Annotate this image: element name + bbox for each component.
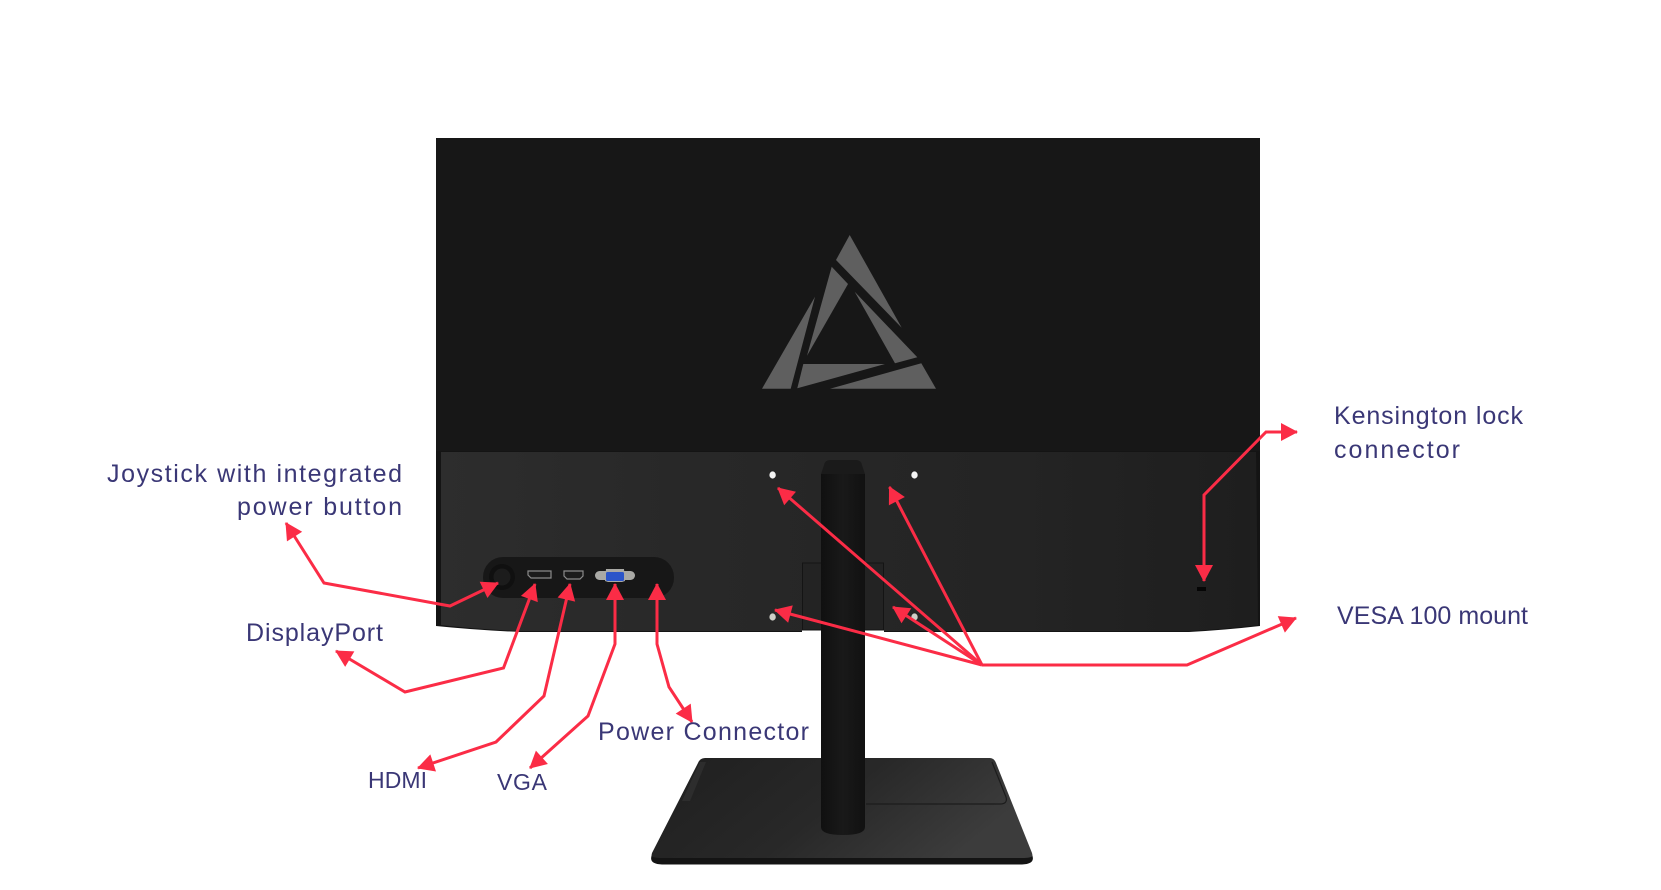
label: Kensington lock connector: Kensington lock bbox=[1334, 402, 1524, 430]
icon: HDMI socket bbox=[564, 571, 583, 579]
lower panel bbox=[441, 452, 1258, 631]
arrow: power connector bbox=[657, 584, 692, 722]
icon: joystick bbox=[489, 564, 515, 590]
logo bbox=[762, 235, 936, 389]
monitor back: lower housing bbox=[436, 451, 1260, 632]
stand neck bbox=[821, 460, 865, 835]
arrow: HDMI bbox=[418, 584, 570, 768]
arrow: joystick bbox=[286, 523, 498, 606]
monitor back: upper housing bbox=[436, 138, 1260, 452]
label: VESA mount: VESA 100 mount bbox=[1337, 602, 1528, 630]
label: Kensington lock connector: connector bbox=[1334, 436, 1460, 464]
VESA screw holes bbox=[769, 471, 918, 621]
Kensington slot bbox=[1197, 587, 1206, 591]
label: joystick: power button bbox=[237, 493, 402, 521]
label: DisplayPort: DisplayPort bbox=[246, 619, 383, 647]
arrow: Kensington lock bbox=[1204, 432, 1297, 581]
stand base bbox=[651, 758, 1033, 864]
arrow: DisplayPort bbox=[336, 584, 535, 692]
label: joystick: Joystick with integrated bbox=[107, 460, 402, 488]
label: HDMI: HDMI bbox=[368, 767, 427, 793]
label: joystick bbox=[107, 460, 402, 521]
stand bracket bbox=[802, 563, 884, 630]
label: power connector: Power Connector bbox=[598, 718, 809, 746]
icon: VGA socket bbox=[595, 569, 635, 582]
label: Kensington lock connector bbox=[1334, 402, 1524, 464]
port panel bbox=[483, 557, 674, 598]
icon: DisplayPort socket bbox=[528, 571, 551, 578]
arrows: VESA mount bbox=[775, 487, 1296, 665]
label: VGA: VGA bbox=[497, 769, 548, 795]
arrow: VGA bbox=[530, 584, 615, 768]
